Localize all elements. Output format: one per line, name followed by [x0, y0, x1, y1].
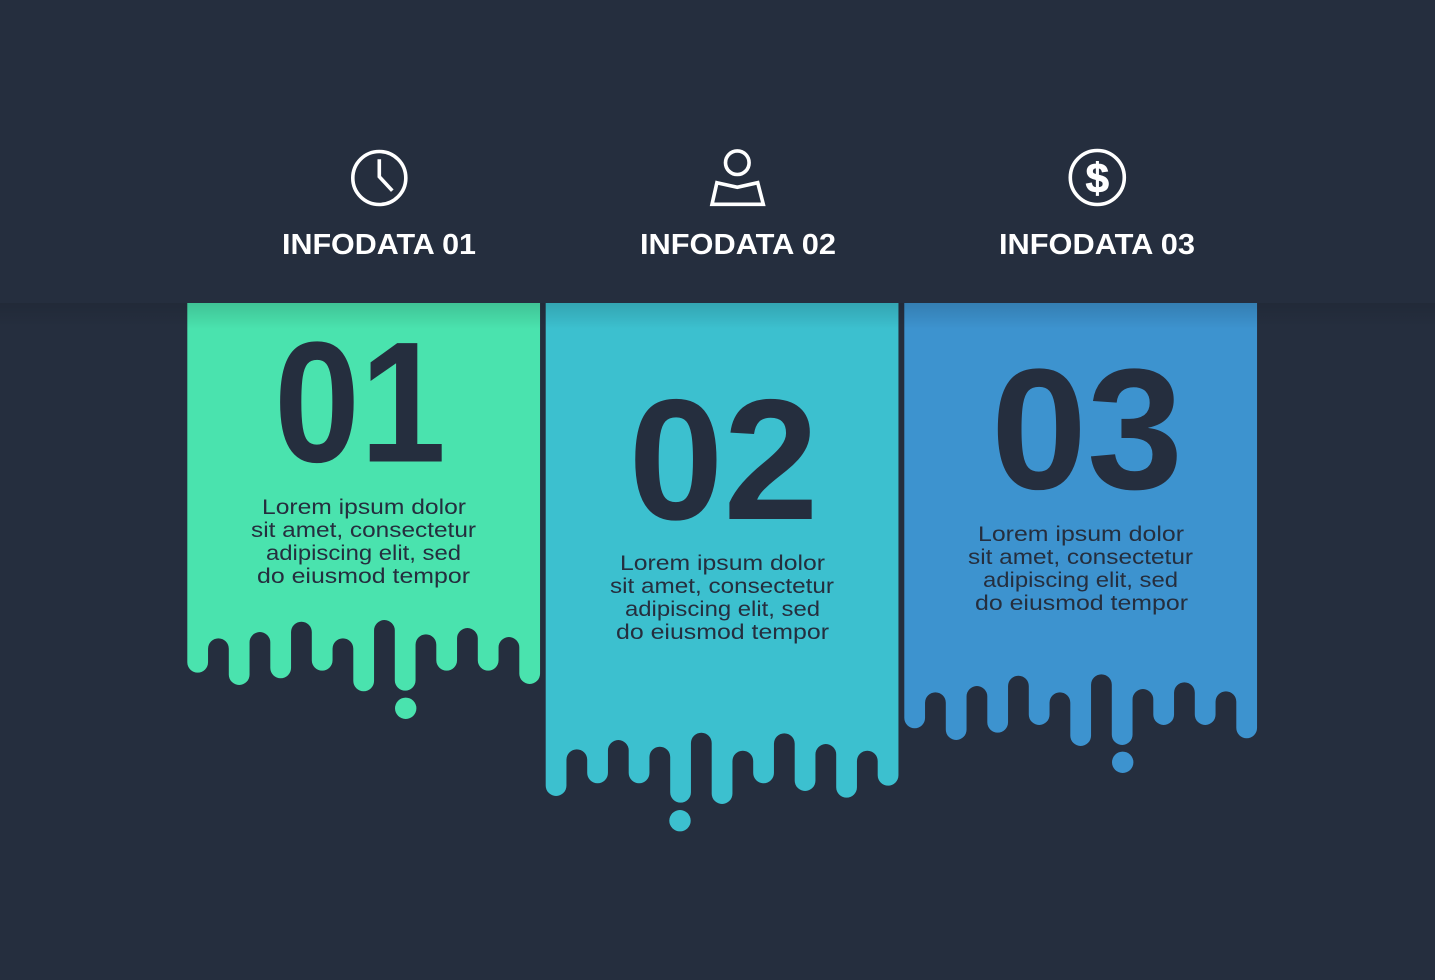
- number 02: 02: [628, 364, 818, 556]
- icon: clock: [353, 152, 406, 204]
- text block 3: sit amet, consectetur: [968, 546, 1193, 569]
- text block 2: adipiscing elit, sed: [625, 598, 820, 621]
- text block 1: sit amet, consectetur: [251, 519, 476, 542]
- text block 1: [251, 496, 476, 588]
- text block 2: Lorem ipsum dolor: [620, 552, 825, 575]
- panel 1: green drip banner: [187, 303, 540, 719]
- text block 2: sit amet, consectetur: [610, 575, 834, 598]
- heading: infodata 02: INFODATA 02: [640, 229, 836, 261]
- panel 3: blue drip banner: [904, 303, 1257, 773]
- number 01: 01: [274, 306, 446, 498]
- text block 1: adipiscing elit, sed: [266, 542, 461, 565]
- panel 2: teal drip banner: [546, 303, 898, 831]
- text block 3: adipiscing elit, sed: [983, 569, 1178, 592]
- text block 1: do eiusmod tempor: [257, 565, 470, 588]
- heading: infodata 03: INFODATA 03: [999, 229, 1195, 261]
- text block 3: [968, 523, 1193, 615]
- icon: dollar coin: [1070, 150, 1124, 204]
- heading: infodata 01: INFODATA 01: [282, 229, 476, 261]
- text block 2: [610, 552, 834, 644]
- top band shadow: [0, 303, 1435, 327]
- icon: person on map: [712, 151, 763, 204]
- icon: dollar coin: $: [1086, 154, 1109, 202]
- text block 1: Lorem ipsum dolor: [262, 496, 466, 519]
- text block 3: Lorem ipsum dolor: [978, 523, 1184, 546]
- number 03: 03: [991, 334, 1183, 526]
- text block 3: do eiusmod tempor: [975, 592, 1188, 615]
- text block 2: do eiusmod tempor: [616, 621, 829, 644]
